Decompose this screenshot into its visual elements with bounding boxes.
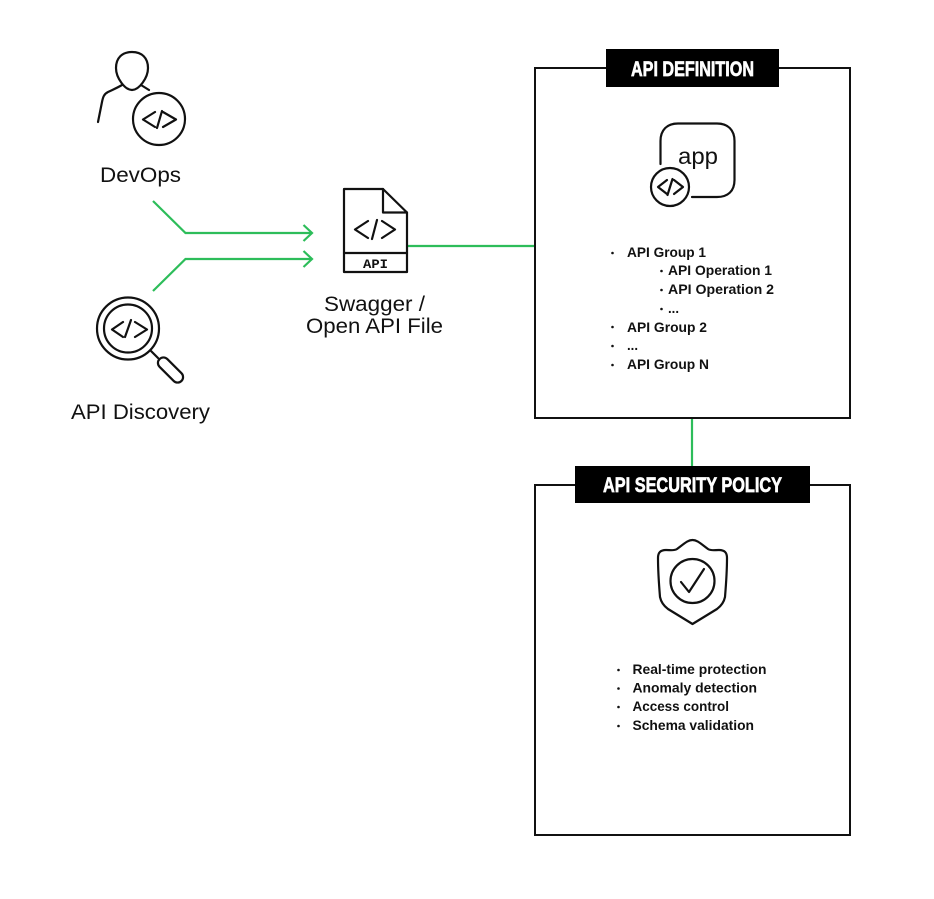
list: API groups and operations xyxy=(611,244,774,372)
list: API groups and operations: API Group N xyxy=(627,356,709,372)
label: Swagger / Open API File: Swagger / xyxy=(324,293,425,316)
icon: DevOps person with code badge xyxy=(98,52,185,145)
heading: API definition: API DEFINITION xyxy=(631,58,754,81)
label: DevOps: DevOps xyxy=(100,164,181,187)
icon: app with code badge: app xyxy=(678,143,718,169)
list: API groups and operations: ... xyxy=(668,300,679,316)
list: API groups and operations: API Operation 1 xyxy=(668,262,772,278)
heading: API security policy: API SECURITY POLICY xyxy=(603,474,782,497)
heading: API security policy xyxy=(575,466,810,503)
arrow: API Discovery to file xyxy=(153,251,312,291)
list: API groups and operations: ... xyxy=(627,337,638,353)
icon: API file xyxy=(344,189,407,272)
icon: app with code badge xyxy=(651,124,734,206)
arrow: DevOps to file xyxy=(153,201,312,241)
label: Swagger / Open API File: Open API File xyxy=(306,315,443,338)
connector: file to API definition xyxy=(407,245,535,247)
label: API Discovery: API Discovery xyxy=(71,401,211,424)
icon: API file: API xyxy=(363,257,388,272)
label: Swagger / Open API File xyxy=(306,293,443,338)
list: API groups and operations: API Group 1 xyxy=(627,244,706,260)
heading: API definition xyxy=(606,49,779,87)
list: security features: Schema validation xyxy=(632,717,754,733)
icon: shield with check mark xyxy=(658,540,727,624)
list: API groups and operations: API Operation 2 xyxy=(668,281,774,297)
list: security features: Real-time protection xyxy=(632,661,766,677)
panel: API definition xyxy=(535,49,850,418)
list: API groups and operations: API Group 2 xyxy=(627,319,707,335)
list: security features xyxy=(617,661,766,733)
connector: API definition to security policy xyxy=(691,418,693,466)
icon: API discovery magnifier xyxy=(97,298,185,385)
list: security features: Access control xyxy=(632,698,729,714)
list: security features: Anomaly detection xyxy=(632,680,757,696)
panel: API security policy xyxy=(535,466,850,835)
